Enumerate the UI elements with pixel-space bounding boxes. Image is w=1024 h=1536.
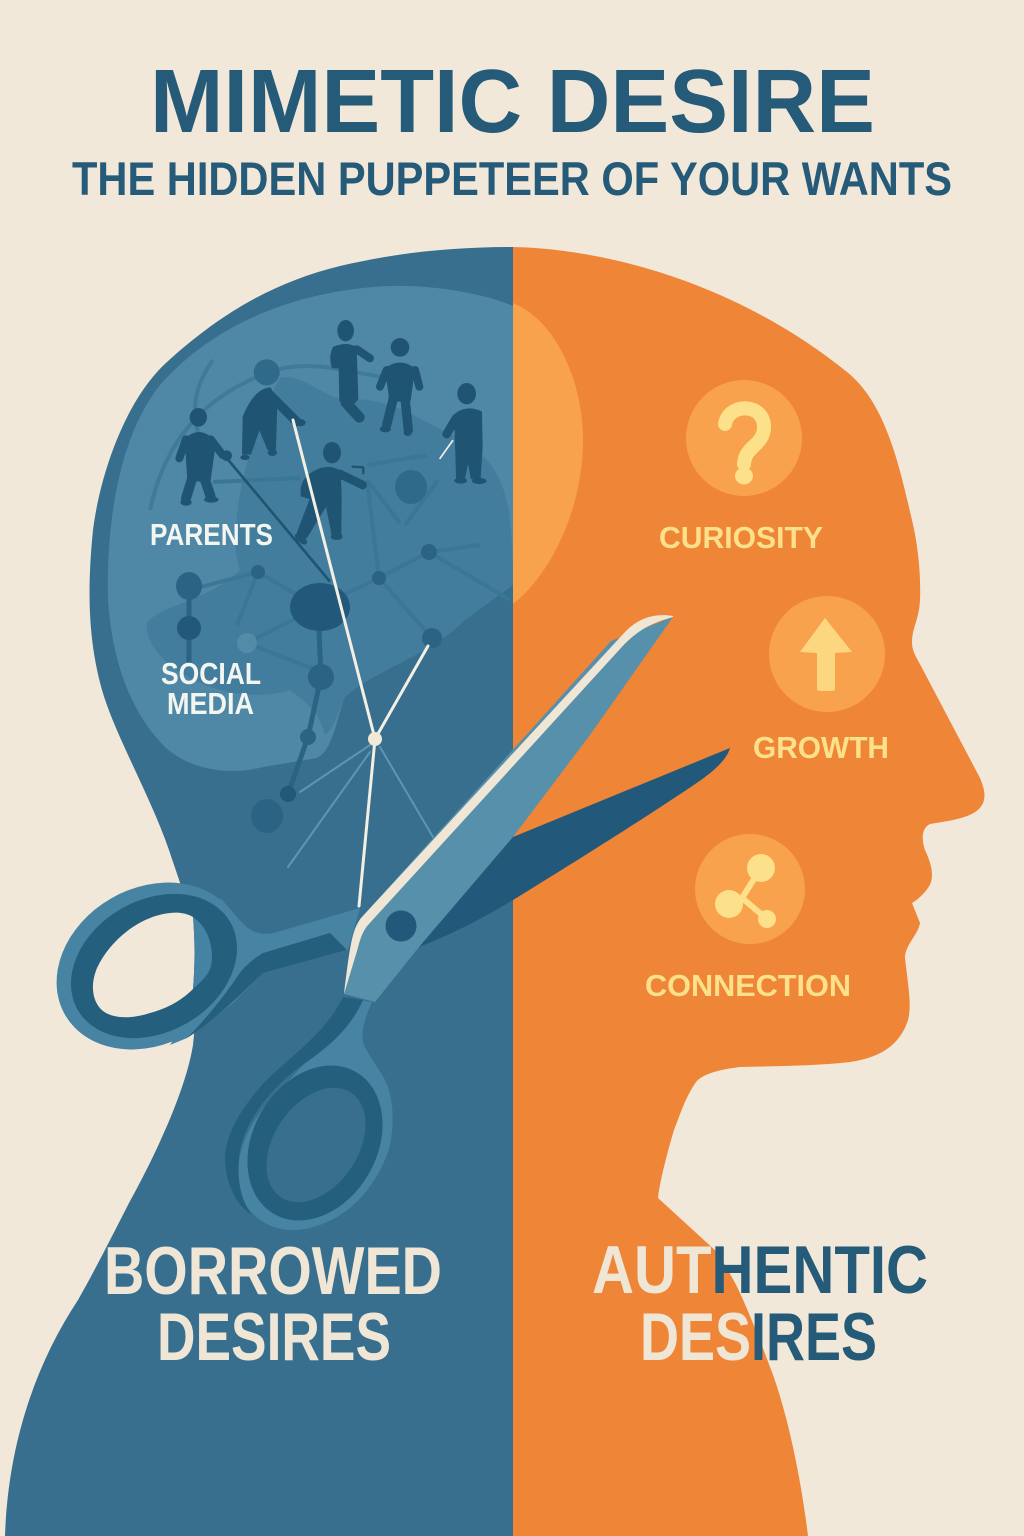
figure 2: [240, 359, 306, 460]
upper blade: [344, 617, 673, 1002]
label: social media: MEDIA: [167, 686, 254, 721]
network nodes: [176, 470, 442, 833]
faint strings: [288, 745, 433, 867]
left ring light outer: [26, 849, 274, 1083]
upper blade cream edge: [344, 615, 673, 994]
growth circle: [769, 596, 885, 712]
figure 6: [293, 442, 363, 547]
figure 1: [179, 408, 232, 506]
icon: scissors: [26, 615, 730, 1245]
dark lower blade: [419, 748, 730, 947]
dark puppet string: [228, 460, 330, 582]
scissors pivot: [386, 910, 416, 942]
darker brain lobes: [147, 377, 513, 735]
brain network: [176, 455, 510, 833]
connection circle: [695, 834, 805, 944]
label: curiosity: CURIOSITY: [659, 520, 823, 555]
dark network links: [189, 586, 321, 794]
left ring opening: [93, 913, 194, 1017]
heading: borrowed desires: BORROWED: [104, 1233, 442, 1309]
lower brain fold: [150, 360, 400, 510]
icon: growth: [769, 596, 885, 712]
lower handle: [220, 997, 410, 1245]
left ring inner crescent: [193, 917, 212, 989]
lower handle dark crescent: [225, 997, 363, 1215]
faint network links: [189, 455, 510, 672]
left handle dark stripe: [187, 933, 347, 1038]
left handle arm: [170, 898, 360, 1045]
blue head silhouette: [5, 247, 513, 1536]
puppet strings: [288, 420, 433, 906]
up arrow: [800, 618, 852, 691]
figure 3: [332, 320, 370, 417]
left handle: [26, 849, 360, 1083]
label: parents: PARENTS: [150, 517, 273, 552]
label: growth: GROWTH: [753, 730, 889, 765]
heading: authentic desires: DESIRES: [640, 1299, 877, 1375]
figure 4: [380, 338, 419, 436]
lower ring dark band: [220, 1041, 410, 1245]
icon: curiosity: [686, 380, 802, 496]
label: connection: CONNECTION: [645, 968, 851, 1003]
people figures: [179, 320, 487, 582]
left ring dark band: [45, 865, 263, 1067]
heading: authentic desires: [592, 1232, 928, 1375]
string knot: [368, 732, 382, 746]
label: social media: SOCIAL: [161, 656, 261, 691]
icon: connection: [695, 834, 805, 944]
panel: blue borrowed half of head: [5, 247, 513, 1536]
lighter orange brain area: [513, 303, 583, 604]
white strings: [293, 420, 428, 906]
lower handle light body: [238, 997, 393, 1230]
label: social media: [161, 656, 261, 721]
panel: orange authentic half of head: [513, 247, 984, 1536]
lower ring opening: [246, 1069, 386, 1221]
heading: borrowed desires: [104, 1233, 442, 1375]
title: MIMETIC DESIRE: [150, 52, 875, 152]
orange head silhouette: [513, 247, 984, 1536]
connection nodes: [715, 854, 776, 928]
curiosity circle: [686, 380, 802, 496]
heading: borrowed desires: DESIRES: [157, 1299, 391, 1375]
question dot: [735, 468, 753, 484]
heading: authentic desires: AUTHENTIC: [592, 1232, 928, 1308]
lighter brain area: [108, 286, 513, 771]
question mark: [725, 408, 764, 464]
figure 5: [440, 383, 487, 484]
connection links: [742, 868, 767, 919]
